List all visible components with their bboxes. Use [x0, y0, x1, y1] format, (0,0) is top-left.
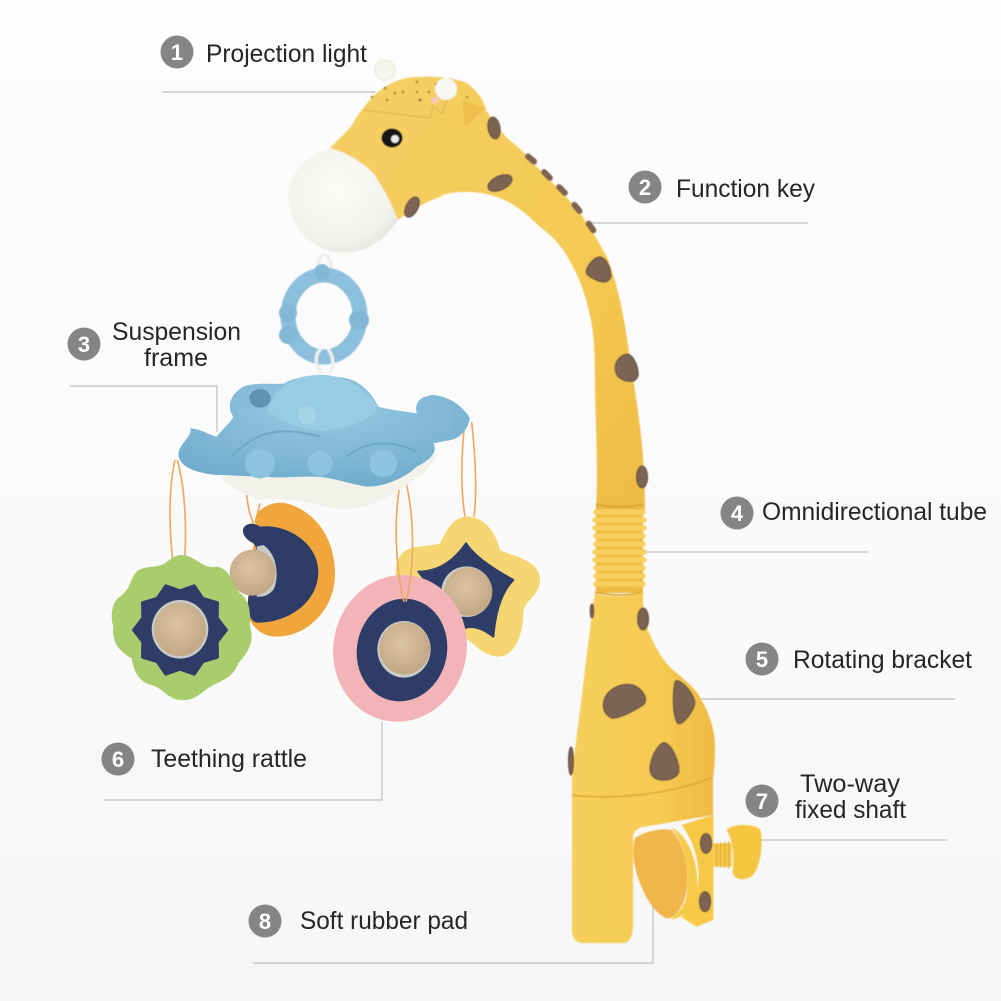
label 3: suspension frame: Suspension — [112, 318, 241, 346]
label 4: omnidirectional tube: 4 — [731, 501, 744, 526]
yellow star rattle — [396, 422, 540, 657]
orange moon rattle — [230, 495, 335, 637]
head details — [382, 128, 402, 148]
pink ring rattle — [319, 475, 481, 734]
function keys — [524, 152, 597, 234]
giraffe stand — [288, 60, 762, 943]
label 3: suspension frame: frame — [144, 344, 208, 372]
two-way fixed shaft — [699, 825, 762, 912]
green flower rattle — [112, 460, 252, 700]
suspension ring with hooks — [279, 254, 369, 373]
horns — [375, 60, 395, 80]
blue suspension frame — [178, 375, 470, 509]
label 8: soft rubber pad: Soft rubber pad — [300, 907, 468, 935]
label 6: teething rattle: 6 — [112, 747, 124, 772]
label 1: projection light — [160, 36, 375, 92]
label 7: two-way fixed shaft — [745, 770, 947, 840]
label 1: projection light: 1 — [171, 40, 183, 65]
body and clamp base — [572, 592, 715, 943]
rubber pad — [633, 815, 713, 927]
label 3: suspension frame: 3 — [78, 332, 90, 357]
label 5: rotating bracket: Rotating bracket — [793, 646, 972, 674]
label 2: function key: Function key — [676, 175, 815, 203]
label 7: two-way fixed shaft: Two-way — [800, 770, 900, 798]
label 5: rotating bracket: 5 — [756, 647, 768, 672]
label 7: two-way fixed shaft: fixed shaft — [795, 796, 906, 824]
label 8: soft rubber pad: 8 — [259, 909, 271, 934]
label 2: function key — [568, 170, 815, 223]
label 5: rotating bracket — [700, 642, 972, 699]
label 3: suspension frame — [68, 318, 241, 432]
label 2: function key: 2 — [639, 175, 651, 200]
label 4: omnidirectional tube: Omnidirectional tube — [762, 498, 987, 526]
label 8: soft rubber pad — [248, 900, 653, 963]
label 4: omnidirectional tube — [645, 496, 987, 552]
neck spots — [486, 116, 502, 140]
snout — [288, 148, 398, 252]
label 6: teething rattle — [102, 722, 382, 800]
giraffe neck and head — [330, 77, 645, 510]
body spots — [638, 608, 648, 630]
label 1: projection light: Projection light — [206, 40, 367, 68]
omnidirectional tube — [595, 503, 644, 595]
label 6: teething rattle: Teething rattle — [151, 745, 307, 773]
label 7: two-way fixed shaft: 7 — [756, 789, 768, 814]
